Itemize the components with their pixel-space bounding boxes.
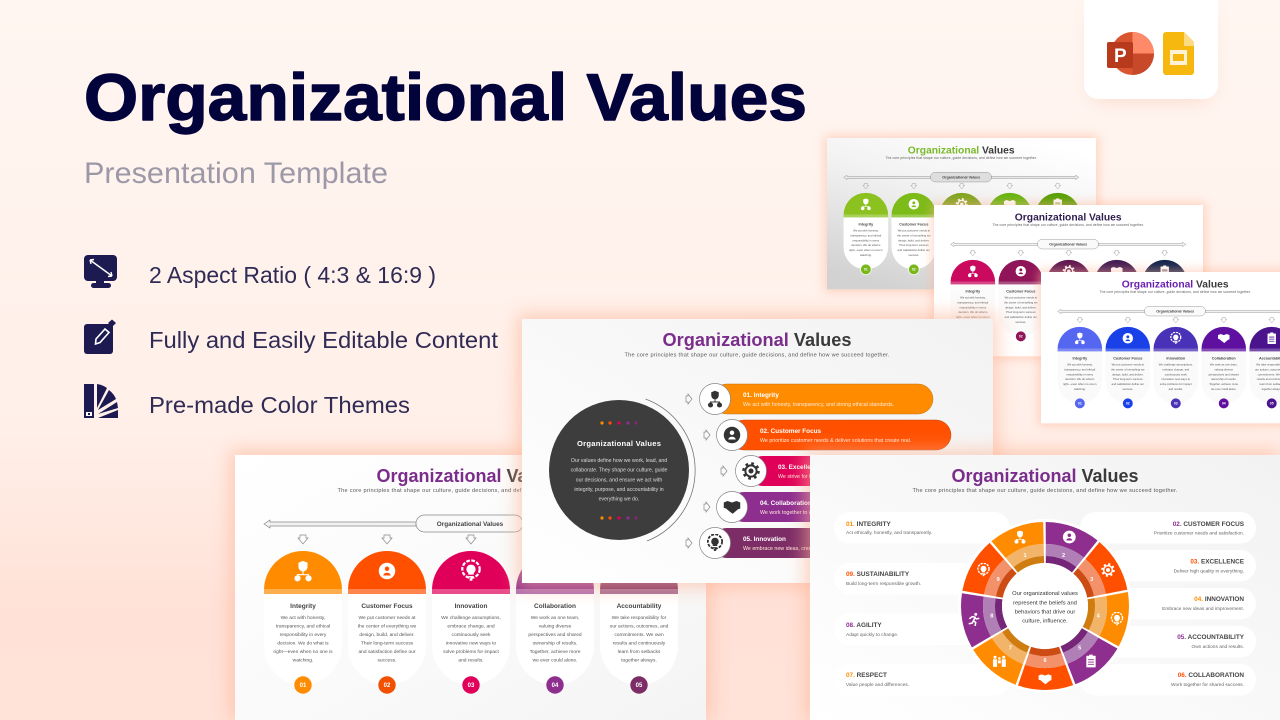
pill: Collaboration: We work together to achieve shared goals.	[760, 510, 860, 516]
column: Collaboration (covered)	[987, 184, 1032, 217]
column: Accountability: learn from setbacks	[618, 649, 661, 655]
segment 4	[961, 522, 1129, 690]
feature: aspect ratio: 2 Aspect Ratio ( 4:3 & 16:9 )	[149, 262, 436, 288]
segment 3	[942, 503, 1148, 709]
column: Accountability: commitments. We own	[614, 632, 664, 638]
column: Customer Focus: We put customer needs at	[1005, 296, 1037, 300]
slide: ring layout: The core principles that shape our culture, guide decisions, and define how we succeed together.	[912, 488, 1178, 494]
column: Collaboration: ownership of results.	[1211, 377, 1237, 381]
column: Customer Focus: Their long-term success	[1113, 377, 1143, 381]
feature: color themes	[84, 384, 410, 418]
ring numbers: 5	[1078, 645, 1081, 651]
column: Customer Focus: and satisfaction define our	[358, 649, 416, 655]
column: Integrity: We act with honesty,	[853, 229, 879, 233]
label: collaboration	[1080, 664, 1256, 696]
slide: ring layout	[805, 450, 1280, 720]
column: Customer Focus: 02	[912, 267, 916, 271]
column: Customer Focus: design, build, and deliver.	[359, 632, 415, 638]
column: Customer Focus: success.	[1015, 320, 1026, 324]
column: Integrity: transparency, and ethical	[276, 624, 330, 630]
column: Customer Focus: the center of everything we	[358, 624, 417, 630]
arrow banner: Organizational Values	[942, 176, 980, 180]
label: customer focus	[1080, 512, 1256, 544]
column: Innovation: embrace change, and	[1162, 368, 1190, 372]
label: sustainability	[834, 563, 984, 594]
segment 1	[942, 503, 1148, 709]
pill: Excellence: 03. Excellence	[778, 464, 822, 471]
column: Integrity	[1058, 318, 1102, 408]
label: agility	[834, 614, 984, 645]
slide: purple theme	[1039, 270, 1280, 426]
label: integrity: 01. INTEGRITY	[846, 521, 891, 528]
pill: Excellence	[721, 456, 970, 486]
column: Innovation: Innovation	[455, 603, 487, 610]
label: integrity: Act ethically, honestly, and transparently.	[846, 530, 932, 536]
label: agility: 08. AGILITY	[846, 622, 882, 629]
column: Integrity	[264, 535, 342, 694]
feature: color themes: Pre-made Color Themes	[149, 392, 410, 418]
ring numbers: 7	[1009, 645, 1012, 651]
column: Innovation: and results.	[458, 658, 484, 664]
arrow banner	[844, 172, 1079, 182]
column: Collaboration: Together, achieve more	[1209, 382, 1239, 386]
column: Integrity: transparency, and ethical	[850, 234, 882, 238]
icon: monitor	[84, 255, 117, 288]
label: excellence: Deliver high quality in everything.	[1174, 568, 1244, 574]
ring numbers: 2	[1062, 553, 1065, 559]
segment 9	[959, 520, 1131, 692]
column: Customer Focus: and satisfaction define our	[1112, 382, 1144, 386]
heading: Organizational Values	[1122, 278, 1229, 290]
column: Accountability: 05	[636, 683, 643, 689]
column: Customer Focus	[348, 535, 426, 694]
column: Integrity: We act with honesty,	[1067, 363, 1093, 367]
label: agility: Adapt quickly to change.	[846, 632, 898, 638]
center circle: collaborate. They shape our culture, guide	[571, 468, 668, 474]
column: Customer Focus: success.	[908, 253, 919, 257]
column: Collaboration: perspectives and shared	[1209, 372, 1239, 376]
title: Organizational Values	[84, 60, 807, 134]
column: Accountability	[1249, 318, 1280, 408]
pill: Collaboration	[704, 492, 951, 522]
column: Collaboration: We work as one team,	[1210, 363, 1238, 367]
column: Innovation: 03	[1174, 401, 1178, 405]
column: Customer Focus: 02	[1126, 401, 1130, 405]
column: Integrity: Integrity	[1073, 356, 1088, 360]
column: Integrity: Integrity	[290, 603, 316, 610]
label: innovation: 04. INNOVATION	[1194, 596, 1244, 603]
pill: Integrity: We act with honesty, transparency, and strong ethical standards.	[743, 402, 894, 408]
column: Customer Focus: We put customer needs at	[898, 229, 930, 233]
column: Collaboration: Collaboration	[1212, 356, 1236, 360]
label: respect: 07. RESPECT	[846, 672, 887, 679]
column: Customer Focus: and satisfaction define our	[898, 248, 930, 252]
segment 6	[952, 513, 1138, 699]
column: Customer Focus: 02	[1019, 334, 1023, 338]
segment 8	[946, 507, 1144, 705]
column: Integrity: 01	[300, 683, 307, 689]
center circle: Our values define how we work, lead, and	[571, 458, 667, 464]
column: Customer Focus: Customer Focus	[899, 222, 928, 226]
arrow banner	[1058, 306, 1280, 316]
pill: Collaboration: 04. Collaboration	[760, 500, 812, 507]
right value labels	[1080, 512, 1256, 696]
arrow banner: Organizational Values	[437, 521, 504, 528]
slide: orange column layout	[230, 450, 711, 720]
column: Customer Focus: Customer Focus	[1113, 356, 1142, 360]
column: Integrity	[844, 184, 888, 275]
column: Customer Focus: Customer Focus	[361, 603, 413, 610]
segment 7	[951, 512, 1139, 700]
left value labels	[834, 512, 1010, 696]
column: Customer Focus: 02	[384, 683, 391, 689]
column: Integrity: watching.	[293, 658, 313, 664]
column: Customer Focus: We put customer needs at	[358, 615, 416, 621]
column: Collaboration: 04	[1222, 401, 1226, 405]
slide: circle and pills layout: The core principles that shape our culture, guide decisions, and define how we succeed together.	[624, 352, 890, 358]
column: Collaboration: we ever could alone.	[533, 658, 577, 664]
column: Customer Focus: Their long-term success	[899, 243, 929, 247]
column: Collaboration	[516, 535, 594, 694]
ring numbers: 8	[990, 613, 993, 619]
column: Customer Focus: the center of everything we	[1111, 368, 1145, 372]
column: Integrity: We act with honesty,	[960, 296, 986, 300]
column: Innovation: We challenge assumptions,	[441, 615, 501, 621]
column: Innovation: continuously seek	[1165, 372, 1187, 376]
column: Accountability (covered)	[1142, 251, 1187, 284]
column: Innovation: embrace change, and	[447, 624, 495, 630]
column: Customer Focus: design, build, and deliver.	[1112, 372, 1144, 376]
subtitle: Presentation Template	[84, 157, 388, 190]
column: Innovation	[432, 535, 510, 694]
column: Integrity	[951, 251, 995, 336]
pill: Innovation: We embrace new ideas, creativity, and continuous improvement.	[743, 546, 894, 552]
column: Accountability	[600, 535, 678, 694]
column: Accountability: our actions, outcomes, and	[610, 624, 669, 630]
feature list	[84, 255, 499, 418]
column: Innovation (covered)	[1047, 251, 1091, 284]
column: Integrity: responsibility in every	[1067, 372, 1094, 376]
label: customer focus: 02. CUSTOMER FOCUS	[1173, 521, 1245, 528]
slide: magenta theme	[932, 203, 1205, 359]
column: Customer Focus	[999, 251, 1043, 342]
column: Integrity: 01	[1078, 401, 1082, 405]
column: Collaboration	[1201, 318, 1246, 408]
heading: Organizational Values	[952, 465, 1138, 486]
feature: aspect ratio	[84, 255, 436, 288]
center circle: Organizational Values	[577, 439, 661, 448]
label: respect: Value people and differences.	[846, 682, 909, 688]
column: Innovation: We challenge assumptions,	[1159, 363, 1193, 367]
column: Innovation	[1154, 318, 1198, 408]
center text: represent the beliefs and	[1013, 600, 1077, 606]
label: accountability: Own actions and results.	[1191, 644, 1244, 650]
pill: Innovation	[686, 528, 933, 558]
label: accountability	[1106, 626, 1256, 658]
center text: Our organizational values	[1012, 591, 1078, 597]
column: Collaboration: 04	[552, 683, 559, 689]
slide: green theme	[825, 136, 1098, 292]
column: Customer Focus: Customer Focus	[1006, 289, 1035, 293]
center circle: integrity, purpose, and accountability in	[574, 487, 664, 493]
column: Customer Focus: Their long-term success	[1006, 310, 1036, 314]
pill: Customer Focus	[704, 420, 951, 450]
column: Customer Focus	[892, 184, 936, 275]
ring numbers	[990, 553, 1101, 664]
column: Innovation: innovative new ways to	[446, 640, 496, 646]
column: Innovation: solve problems for impact	[1160, 382, 1192, 386]
heading: Organizational Values	[376, 465, 564, 486]
label: collaboration: Work together for shared success.	[1171, 682, 1244, 688]
column: Integrity: responsibility in every	[960, 305, 987, 309]
label: sustainability: 09. SUSTAINABILITY	[846, 571, 910, 578]
column: Integrity: right—even when no one is	[956, 315, 990, 319]
center circle: everything we do.	[599, 497, 639, 503]
label: respect	[834, 664, 1010, 696]
app icon card	[1084, 0, 1218, 102]
icon: Google Slides	[1163, 32, 1194, 75]
label: customer focus: Prioritize customer needs and satisfaction.	[1154, 530, 1244, 536]
label: excellence: 03. EXCELLENCE	[1190, 558, 1245, 566]
column: Integrity: right—even when no one is	[1063, 382, 1097, 386]
column: Integrity: watching.	[860, 253, 872, 257]
pill: Innovation: 05. Innovation	[743, 536, 786, 543]
label: integrity	[834, 512, 1010, 544]
pill: Customer Focus: 02. Customer Focus	[760, 428, 822, 435]
column: Customer Focus: design, build, and deliver.	[898, 238, 930, 242]
segment 5	[945, 506, 1145, 706]
center circle	[549, 399, 695, 541]
column: Integrity: decision. We do what is	[958, 310, 988, 314]
ring numbers: 6	[1043, 658, 1047, 664]
slide: magenta theme: The core principles that shape our culture, guide decisions, and define how we succeed together.	[993, 223, 1144, 227]
column: Customer Focus: and satisfaction define our	[1005, 315, 1037, 319]
column: Innovation (covered)	[940, 184, 984, 217]
center text: culture, influence.	[1022, 618, 1068, 624]
column: Integrity: right—even when no one is	[849, 248, 883, 252]
center text: behaviors that drive our	[1015, 610, 1075, 616]
arrow banner: Organizational Values	[1156, 310, 1194, 314]
column: Integrity: responsibility in every	[280, 632, 327, 638]
ring chart	[942, 503, 1148, 709]
column: Collaboration: perspectives and shared	[528, 632, 582, 638]
column: Collaboration (covered)	[1094, 251, 1139, 284]
pill: Excellence: We strive for high quality in everything we do.	[778, 474, 884, 480]
column: Integrity: transparency, and ethical	[957, 301, 989, 305]
segment 2	[971, 532, 1119, 680]
ring numbers: 1	[1023, 553, 1027, 559]
column: Accountability: together always.	[621, 658, 657, 664]
column: Integrity: watching.	[1074, 387, 1086, 391]
ring numbers: 9	[997, 577, 1000, 583]
column: Integrity: Integrity	[859, 222, 874, 226]
column: Integrity: Integrity	[966, 289, 981, 293]
pill: Integrity: 01. Integrity	[743, 392, 779, 399]
column: Accountability: results and continuously	[613, 640, 666, 646]
column: Integrity: decision. We do what is	[851, 243, 881, 247]
ring numbers: 4	[1097, 613, 1101, 619]
column: Customer Focus: Their long-term success	[361, 640, 414, 646]
column: Customer Focus: the center of everything we	[897, 234, 931, 238]
slide: orange column layout: The core principles that shape our culture, guide decisions, and define how we succeed together.	[338, 488, 603, 494]
icon: PowerPoint: P	[1114, 46, 1127, 67]
column: Innovation: innovative new ways to	[1161, 377, 1191, 381]
label: accountability: 05. ACCOUNTABILITY	[1177, 634, 1245, 641]
column: Integrity: decision. We do what is	[1065, 377, 1095, 381]
column: Collaboration: valuing diverse	[1214, 368, 1233, 372]
label: excellence	[1106, 550, 1256, 582]
arrow banner	[264, 515, 676, 532]
column: Collaboration: Together, achieve more	[530, 649, 581, 655]
column: Integrity: responsibility in every	[853, 238, 880, 242]
column: Customer Focus: success.	[1122, 387, 1133, 391]
arrow banner: Organizational Values	[1049, 243, 1087, 247]
arrow banner	[951, 239, 1186, 249]
label: collaboration: 06. COLLABORATION	[1178, 672, 1244, 679]
column: Integrity: 01	[864, 267, 868, 271]
center text	[1002, 563, 1088, 649]
column: Accountability: 05	[1270, 401, 1274, 405]
column: Customer Focus	[1106, 318, 1150, 408]
column: Collaboration: valuing diverse	[539, 624, 572, 630]
heading: Organizational Values	[662, 329, 852, 350]
heading: Organizational Values	[908, 144, 1015, 156]
label: innovation	[1106, 588, 1256, 620]
column: Integrity: right—even when no one is	[273, 649, 333, 655]
column: Customer Focus: design, build, and deliver.	[1005, 305, 1037, 309]
column: Collaboration: we ever could alone.	[1211, 387, 1237, 391]
column: Innovation: 03	[468, 683, 475, 689]
slide: circle and pills layout	[517, 314, 998, 588]
label: innovation: Embrace new ideas and improvement.	[1162, 606, 1244, 612]
feature: editable	[84, 320, 499, 354]
heading: Organizational Values	[1015, 211, 1122, 223]
ring icons	[969, 531, 1123, 684]
column: Collaboration: We work as one team,	[531, 615, 579, 621]
column: Innovation: continuously seek	[452, 632, 491, 638]
column: Collaboration: Collaboration	[534, 603, 576, 610]
column: Accountability: Accountability	[617, 603, 662, 610]
column: Accountability: We take responsibility for	[612, 615, 667, 621]
column: Innovation: solve problems for impact	[443, 649, 499, 655]
center circle: our decisions, and ensure we act with	[576, 477, 662, 483]
column: Integrity: decision. We do what is	[277, 640, 329, 646]
pill: Customer Focus: We prioritize customer needs & deliver solutions that create real.	[760, 438, 911, 444]
label: sustainability: Build long-term responsible growth.	[846, 581, 921, 587]
icon: palette fan	[84, 384, 118, 418]
column: Customer Focus: We put customer needs at	[1112, 363, 1144, 367]
column: Integrity: We act with honesty,	[281, 615, 325, 621]
column: Collaboration: ownership of results.	[533, 640, 577, 646]
column: Integrity: transparency, and ethical	[1064, 368, 1096, 372]
pill: Integrity	[686, 384, 933, 414]
column: Innovation: and results.	[1169, 387, 1183, 391]
slide: green theme: The core principles that shape our culture, guide decisions, and define how we succeed together.	[886, 156, 1037, 160]
column: Innovation: Innovation	[1166, 356, 1186, 360]
slide: purple theme: The core principles that shape our culture, guide decisions, and define how we succeed together.	[1100, 290, 1251, 294]
column: Accountability (covered)	[1035, 184, 1080, 217]
ring numbers: 3	[1090, 577, 1093, 583]
icon: edit	[84, 320, 116, 354]
feature: editable: Fully and Easily Editable Content	[149, 327, 499, 353]
column: Customer Focus: the center of everything we	[1004, 301, 1038, 305]
column: Customer Focus: success.	[377, 658, 397, 664]
